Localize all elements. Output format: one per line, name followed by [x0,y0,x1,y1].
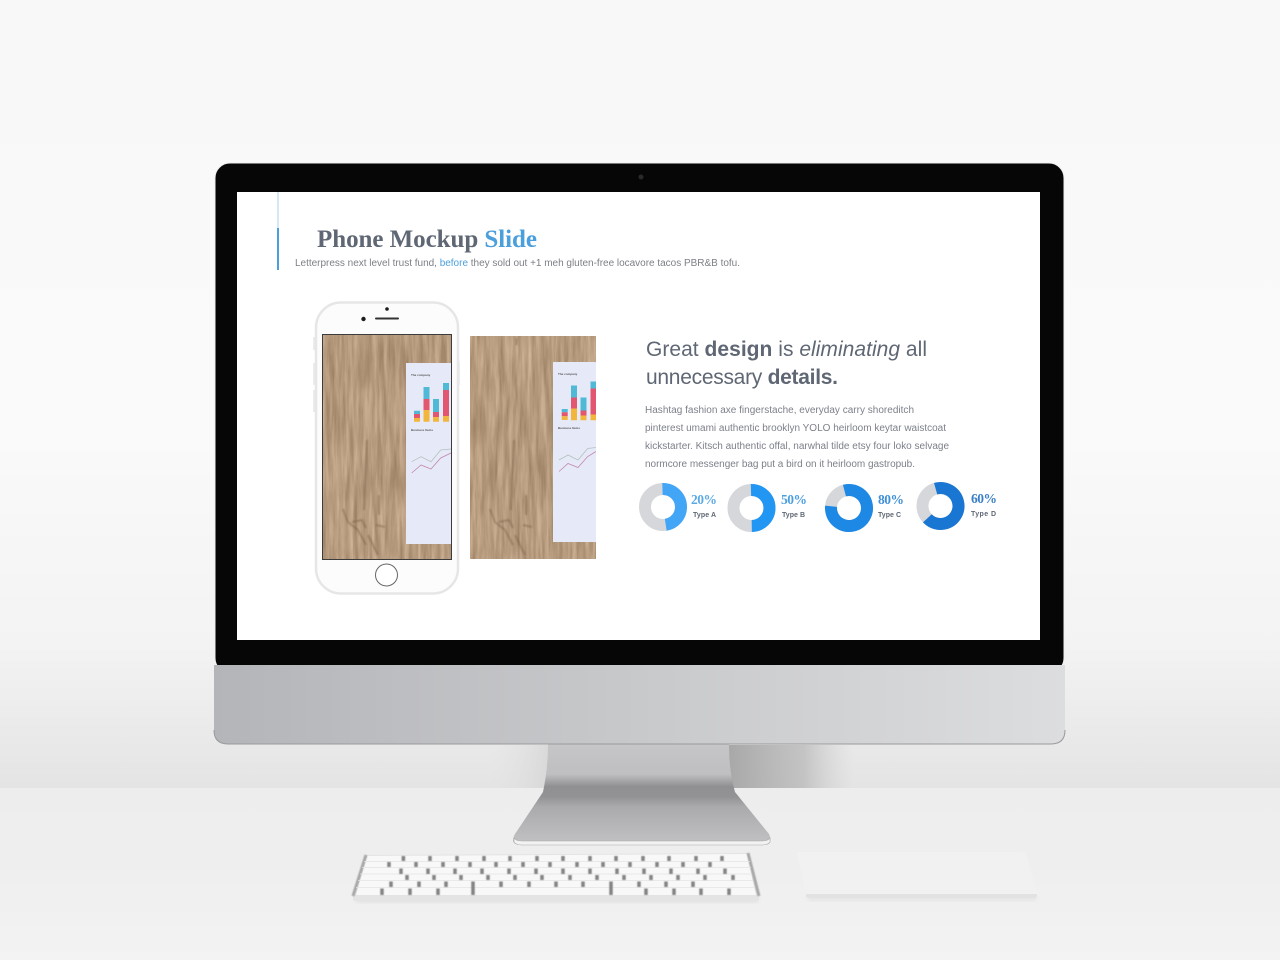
phone screen photo [323,335,451,559]
keyboard shadow [356,898,758,902]
body text: normcore messenger bag put a bird on it heirloom gastropub. [645,459,915,470]
value: 60% [971,491,997,506]
phone camera [361,317,366,321]
report paper [553,362,596,542]
trackpad shadow [808,897,1036,900]
phone speaker [375,318,399,320]
desk surface [0,788,1280,960]
title accent line [277,192,279,270]
donut chart: type D [919,484,997,528]
phone screen border [322,334,452,560]
second paper heading: Business Items [558,426,580,430]
label: Type D [971,511,996,518]
home button [376,564,398,586]
donut chart: type A [645,489,717,525]
trackpad [797,852,1037,900]
heading [646,338,927,389]
wood texture [323,335,451,559]
webcam [638,174,644,180]
line chart [412,449,451,473]
desktop mockup scene [0,164,1280,904]
donut chart: type C [827,486,904,530]
keyboard [353,853,759,902]
keyboard base [353,853,759,901]
phone sensor [385,307,389,311]
trackpad surface [797,852,1037,898]
heading line 2: unnecessary details. [646,366,838,389]
paper heading: The company [558,372,578,376]
trackpad lip [806,894,1037,898]
stacked bar chart [562,382,596,420]
wood knots [343,440,385,555]
value: 20% [691,492,717,507]
second paper heading: Business Items [411,428,433,432]
value: 50% [781,492,807,507]
label: Type C [878,512,901,519]
label: Type B [782,512,805,519]
monitor bezel [215,163,1064,673]
phone mockup [314,302,459,594]
body text: kickstarter. Kitsch authentic offal, narwhal tilde etsy four loko selvage [645,441,949,452]
monitor stand [513,744,770,845]
body text: Hashtag fashion axe fingerstache, everyday carry shoreditch [645,405,914,416]
key gaps [382,856,733,895]
donut chart: type B [734,490,807,526]
wood knots [490,338,532,555]
key surface [356,854,756,895]
title: Phone Mockup Slide [317,226,537,253]
standalone photo [470,336,596,559]
label: Type A [693,512,716,519]
body text [645,405,949,470]
keyboard sides [353,853,759,896]
line chart [559,448,596,472]
phone side buttons [314,337,459,412]
paper heading: The company [411,373,431,377]
phone body [316,302,458,594]
heading line 1: Great design is eliminating all [646,338,927,361]
value: 80% [878,492,904,507]
key row gaps [356,862,755,888]
report paper [406,363,451,544]
monitor [214,163,1065,744]
subtitle: Letterpress next level trust fund, before they sold out +1 meh gluten-free locavore tacos PBR&B tofu. [295,258,740,269]
stacked bar chart [414,383,449,422]
chin bottom edge [214,730,1065,744]
wood texture [470,336,596,559]
slide screen [237,192,1040,640]
monitor shadow on wall [490,745,854,788]
monitor chin [214,665,1065,744]
body text: pinterest umami authentic brooklyn YOLO heirloom keytar waistcoat [645,423,946,434]
